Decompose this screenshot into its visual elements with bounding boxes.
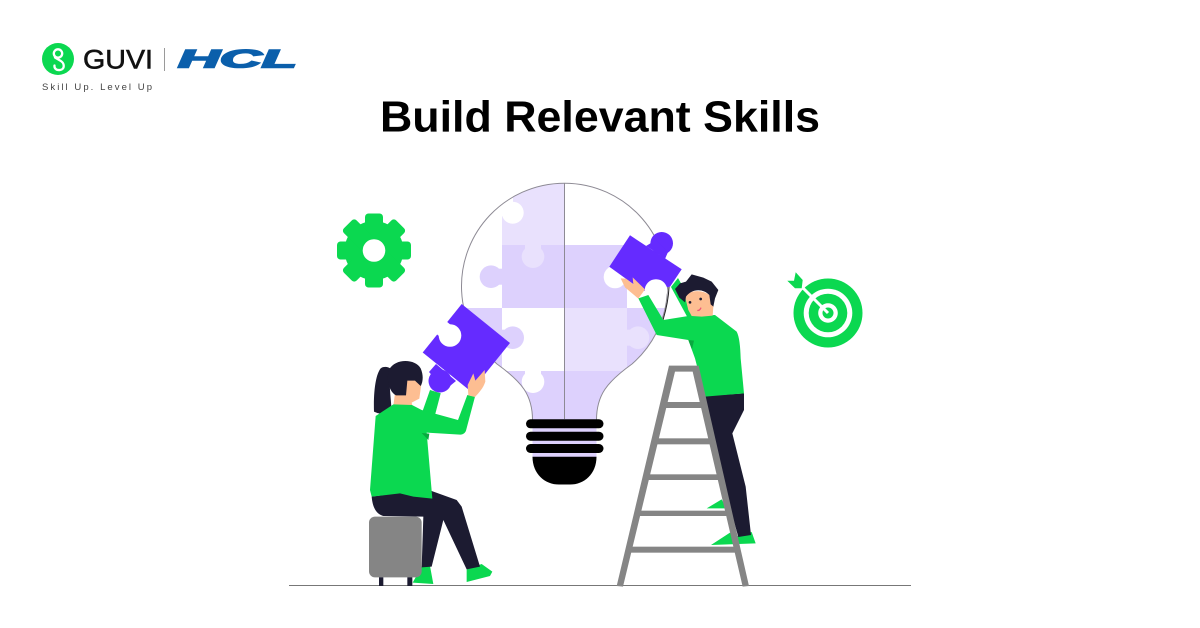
stool bbox=[369, 517, 422, 586]
man's raised arm bbox=[671, 278, 696, 322]
logo divider bbox=[164, 48, 165, 71]
ground line bbox=[289, 585, 911, 586]
bulb puzzle tiles bbox=[467, 184, 664, 457]
bulb screw base bbox=[526, 419, 604, 484]
woman's sweater bbox=[370, 395, 475, 499]
woman's shoes bbox=[413, 564, 492, 584]
man's trousers bbox=[705, 393, 751, 537]
logo: GUVI HCL bbox=[42, 43, 297, 93]
bulb centre line bbox=[564, 183, 565, 419]
puzzle piece: purple right bbox=[609, 232, 682, 302]
man's hand bbox=[621, 277, 645, 299]
icon: target with arrow bbox=[787, 272, 862, 348]
title: Build Relevant Skills bbox=[380, 94, 820, 142]
woman's face and neck bbox=[393, 378, 422, 406]
woman's hair bbox=[388, 361, 423, 395]
GUVI wordmark: GUVI bbox=[83, 44, 153, 74]
man's face bbox=[685, 291, 713, 317]
woman on stool bbox=[369, 361, 492, 586]
icon: GUVI badge bbox=[42, 43, 74, 75]
HCL wordmark: HCL bbox=[178, 46, 297, 74]
icon: gear bbox=[337, 214, 411, 288]
man's head bbox=[675, 274, 718, 317]
man's hair bbox=[675, 274, 718, 307]
infographic canvas bbox=[42, 43, 911, 587]
woman's ponytail bbox=[374, 367, 392, 414]
man's shoes bbox=[707, 499, 756, 545]
sweater fold bbox=[422, 433, 429, 440]
bulb arc behind arm bbox=[663, 287, 669, 320]
ladder bbox=[617, 366, 749, 587]
bulb outline bbox=[462, 183, 668, 420]
woman's hand bbox=[468, 370, 485, 397]
man's sweater bbox=[638, 295, 744, 397]
woman's trousers bbox=[372, 491, 480, 569]
woman's back arm bbox=[423, 390, 441, 415]
tagline: Skill Up. Level Up bbox=[42, 82, 152, 93]
man's eyes and mouth bbox=[689, 298, 702, 310]
man on ladder bbox=[617, 277, 756, 587]
sweater fold bbox=[688, 340, 694, 349]
puzzle piece: purple left bbox=[423, 304, 510, 392]
light bulb bbox=[461, 182, 668, 484]
